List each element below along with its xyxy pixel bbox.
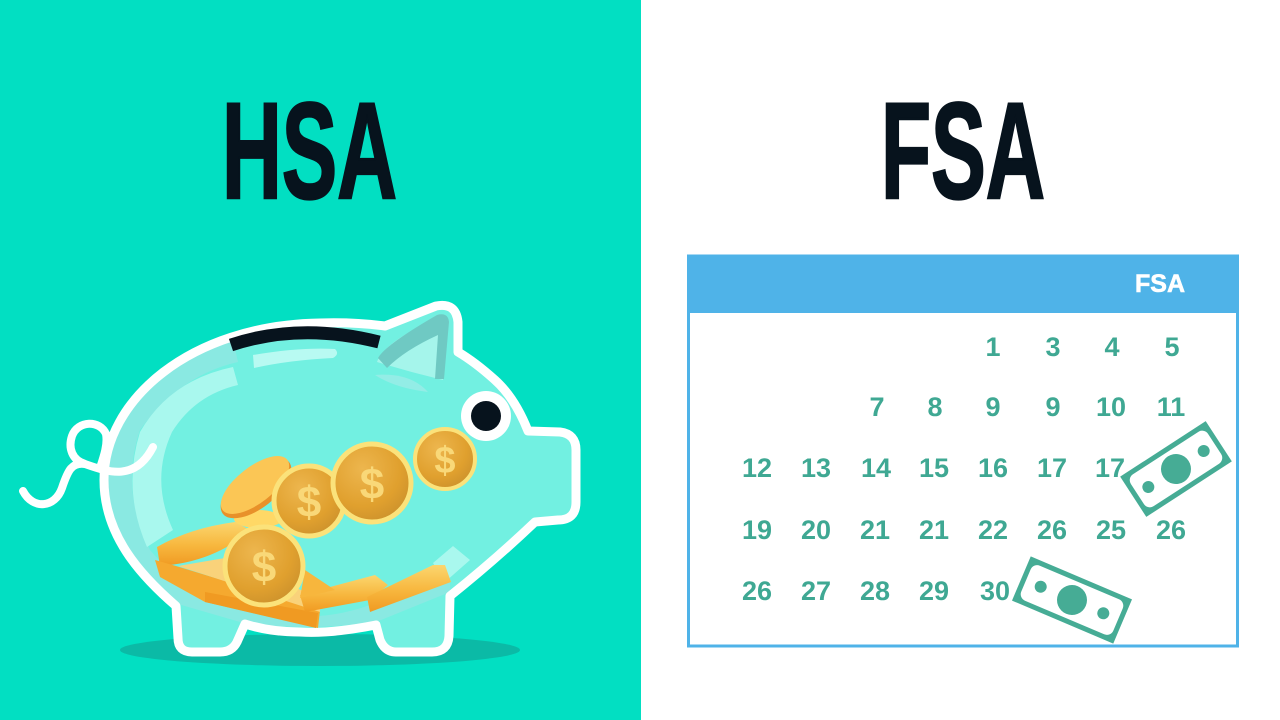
calendar dates: 1 [985,332,1001,362]
coin [225,527,303,605]
calendar dates: 7 [869,392,885,422]
calendar dates: 25 [1096,515,1126,545]
glass edge tint [108,340,450,627]
calendar dates: 26 [742,576,772,606]
coin: $ [434,440,456,482]
calendar frame [688,256,1238,646]
pig eye [461,391,511,441]
calendar dates: 29 [919,576,949,606]
calendar dates: 17 [1095,453,1125,483]
calendar header label: FSA [1135,270,1185,298]
title: HSA: HSA [222,75,397,228]
calendar dates: 11 [1157,392,1185,422]
illustration: glass piggy bank with coins [23,305,576,666]
coin: $ [360,460,384,509]
calendar dates: 21 [919,515,949,545]
calendar dates: 26 [1156,515,1186,545]
coin: $ [297,478,321,527]
calendar dates: 27 [801,576,831,606]
glass highlight ring [132,367,238,547]
calendar dates: 9 [985,392,1001,422]
calendar dates: 4 [1104,332,1120,362]
panel: FSA white background [641,0,1280,720]
coin slot [231,333,379,345]
flat coin pile [155,446,451,628]
calendar dates: 19 [742,515,772,545]
coin [415,429,475,489]
calendar dates [742,332,1186,606]
coin [333,444,411,522]
title: FSA: FSA [881,75,1045,228]
calendar dates: 9 [1045,392,1061,422]
calendar dates: 12 [742,453,772,483]
top highlight [253,349,337,368]
calendar dates: 16 [978,453,1008,483]
coin: $ [252,543,276,592]
calendar header bar [687,255,1239,313]
calendar dates: 10 [1096,392,1126,422]
coin [274,466,344,536]
calendar dates: 17 [1037,453,1067,483]
calendar dates: 8 [927,392,943,422]
icon: dollar bill upper [1120,421,1232,517]
lower right highlight [433,546,470,582]
calendar dates: 21 [860,515,890,545]
calendar dates: 22 [978,515,1008,545]
panel: HSA teal background [0,0,641,720]
calendar dates: 13 [801,453,831,483]
pig outline [104,305,576,652]
calendar dates: 5 [1164,332,1180,362]
calendar dates: 26 [1037,515,1067,545]
calendar [687,255,1239,646]
calendar dates: 20 [801,515,831,545]
pig ear [375,314,449,392]
calendar dates: 3 [1045,332,1061,362]
calendar dates: 30 [980,576,1010,606]
pig body [104,305,576,652]
calendar dates: 14 [861,453,891,483]
calendar dates: 15 [919,453,949,483]
calendar dates: 28 [860,576,890,606]
icon: dollar bill lower [1012,556,1132,644]
curly tail [23,424,153,504]
ground shadow [120,634,520,666]
